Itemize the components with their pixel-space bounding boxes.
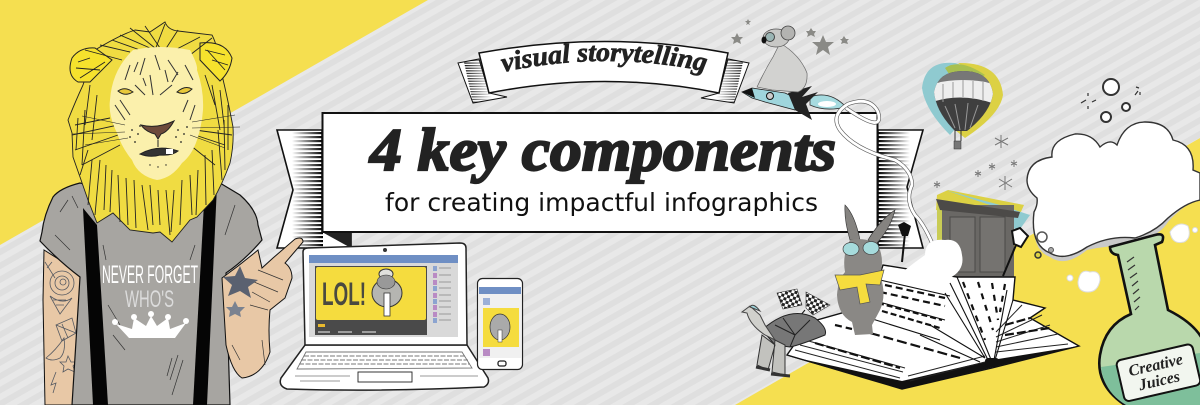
white smoke trail <box>836 101 935 250</box>
webcam <box>383 248 387 252</box>
cloud shadow <box>1033 185 1200 261</box>
page edge lines <box>795 305 1068 381</box>
laptop keyboard <box>295 352 478 382</box>
koala head <box>763 29 789 47</box>
snowflakes <box>934 135 1017 190</box>
book silhouette <box>787 265 1079 389</box>
sidebar items <box>433 266 437 323</box>
smartphone <box>478 278 522 370</box>
laptop lid <box>303 243 467 345</box>
standing page fan <box>850 277 1013 362</box>
shirt slogan <box>102 261 198 338</box>
rabbit ears <box>845 205 895 245</box>
top ribbon: visual storytelling <box>457 40 750 104</box>
muzzle dots <box>129 125 188 168</box>
suspenders <box>83 185 217 405</box>
hamster on scooter <box>372 269 402 316</box>
shirt slogan: WHO'S <box>125 286 174 313</box>
ribbon text: visual storytelling <box>500 43 708 76</box>
rabbit with sunglasses and bow <box>835 205 895 335</box>
rabbit body <box>837 239 884 335</box>
book lower edge <box>788 346 1079 389</box>
balloon envelope <box>934 71 993 131</box>
laptop screen <box>309 255 458 337</box>
checkered flags <box>777 289 830 316</box>
tortoise neck and head <box>742 306 775 340</box>
flask body <box>1099 234 1200 405</box>
flask liquid <box>1101 353 1200 405</box>
background: top-left yellow wedge <box>0 0 428 245</box>
label text: Creative <box>1127 351 1185 380</box>
lion ears <box>70 43 232 82</box>
open book <box>787 265 1079 389</box>
right arm and hand <box>222 238 303 378</box>
face markings <box>115 55 195 120</box>
hot air balloon <box>922 63 1003 149</box>
spark marks <box>1081 87 1140 109</box>
lion face <box>72 47 240 180</box>
banner central panel <box>322 113 878 232</box>
lion nose <box>141 121 174 139</box>
wardrobe door <box>936 190 1030 280</box>
flask of creative juices <box>1099 234 1200 405</box>
rocket body <box>742 88 800 110</box>
koala riding a rocket <box>731 19 849 120</box>
ribbon panel <box>479 42 728 93</box>
LOL text: LOL! <box>322 276 366 312</box>
flask hatching <box>1127 257 1140 310</box>
ribbon tails <box>458 59 749 103</box>
koala body <box>757 43 807 92</box>
street lamps <box>898 222 1028 276</box>
balloon basket <box>954 141 961 149</box>
thought cloud from flask <box>1027 79 1200 292</box>
laptop <box>280 243 488 390</box>
background: bottom-right yellow wedge <box>735 138 1200 405</box>
mane hair strokes <box>72 24 232 235</box>
tortoise shell <box>762 314 826 347</box>
whiskers <box>72 115 240 148</box>
lion mane <box>68 22 233 242</box>
tattooed left arm <box>43 250 84 405</box>
tortoise on roller skates <box>742 289 830 376</box>
title text: 4 key components <box>369 117 836 183</box>
banner left tail <box>277 130 351 248</box>
rabbit sunglasses <box>843 242 879 256</box>
balloon colour blobs <box>922 63 985 135</box>
white smoke cloud on book <box>905 240 962 278</box>
white foam blobs <box>1067 224 1198 292</box>
floating bubbles <box>1035 79 1130 258</box>
shirt folds <box>55 196 235 395</box>
rocket flame <box>810 95 846 109</box>
lion-headed man illustration: NEVER FORGET <box>102 261 198 289</box>
stars <box>731 19 849 55</box>
door colour accents <box>936 190 1024 225</box>
flask label <box>1116 343 1200 402</box>
t-shirt <box>40 183 262 405</box>
lion-headed man illustration <box>40 22 303 405</box>
text squiggles <box>815 282 1050 368</box>
cloud outline <box>1027 122 1200 256</box>
laptop base <box>280 345 488 390</box>
tortoise cap <box>750 305 760 311</box>
door body <box>942 205 1014 280</box>
tortoise legs and skates <box>757 335 785 375</box>
subtitle text: for creating impactful infographics <box>385 188 818 217</box>
banner right tail <box>878 130 923 248</box>
icon: crown <box>112 311 189 338</box>
main title banner <box>277 113 923 248</box>
label text: Juices <box>1136 368 1182 394</box>
lion mouth <box>140 140 178 156</box>
rabbit bow tie <box>835 270 884 304</box>
lion eyes <box>118 88 192 94</box>
